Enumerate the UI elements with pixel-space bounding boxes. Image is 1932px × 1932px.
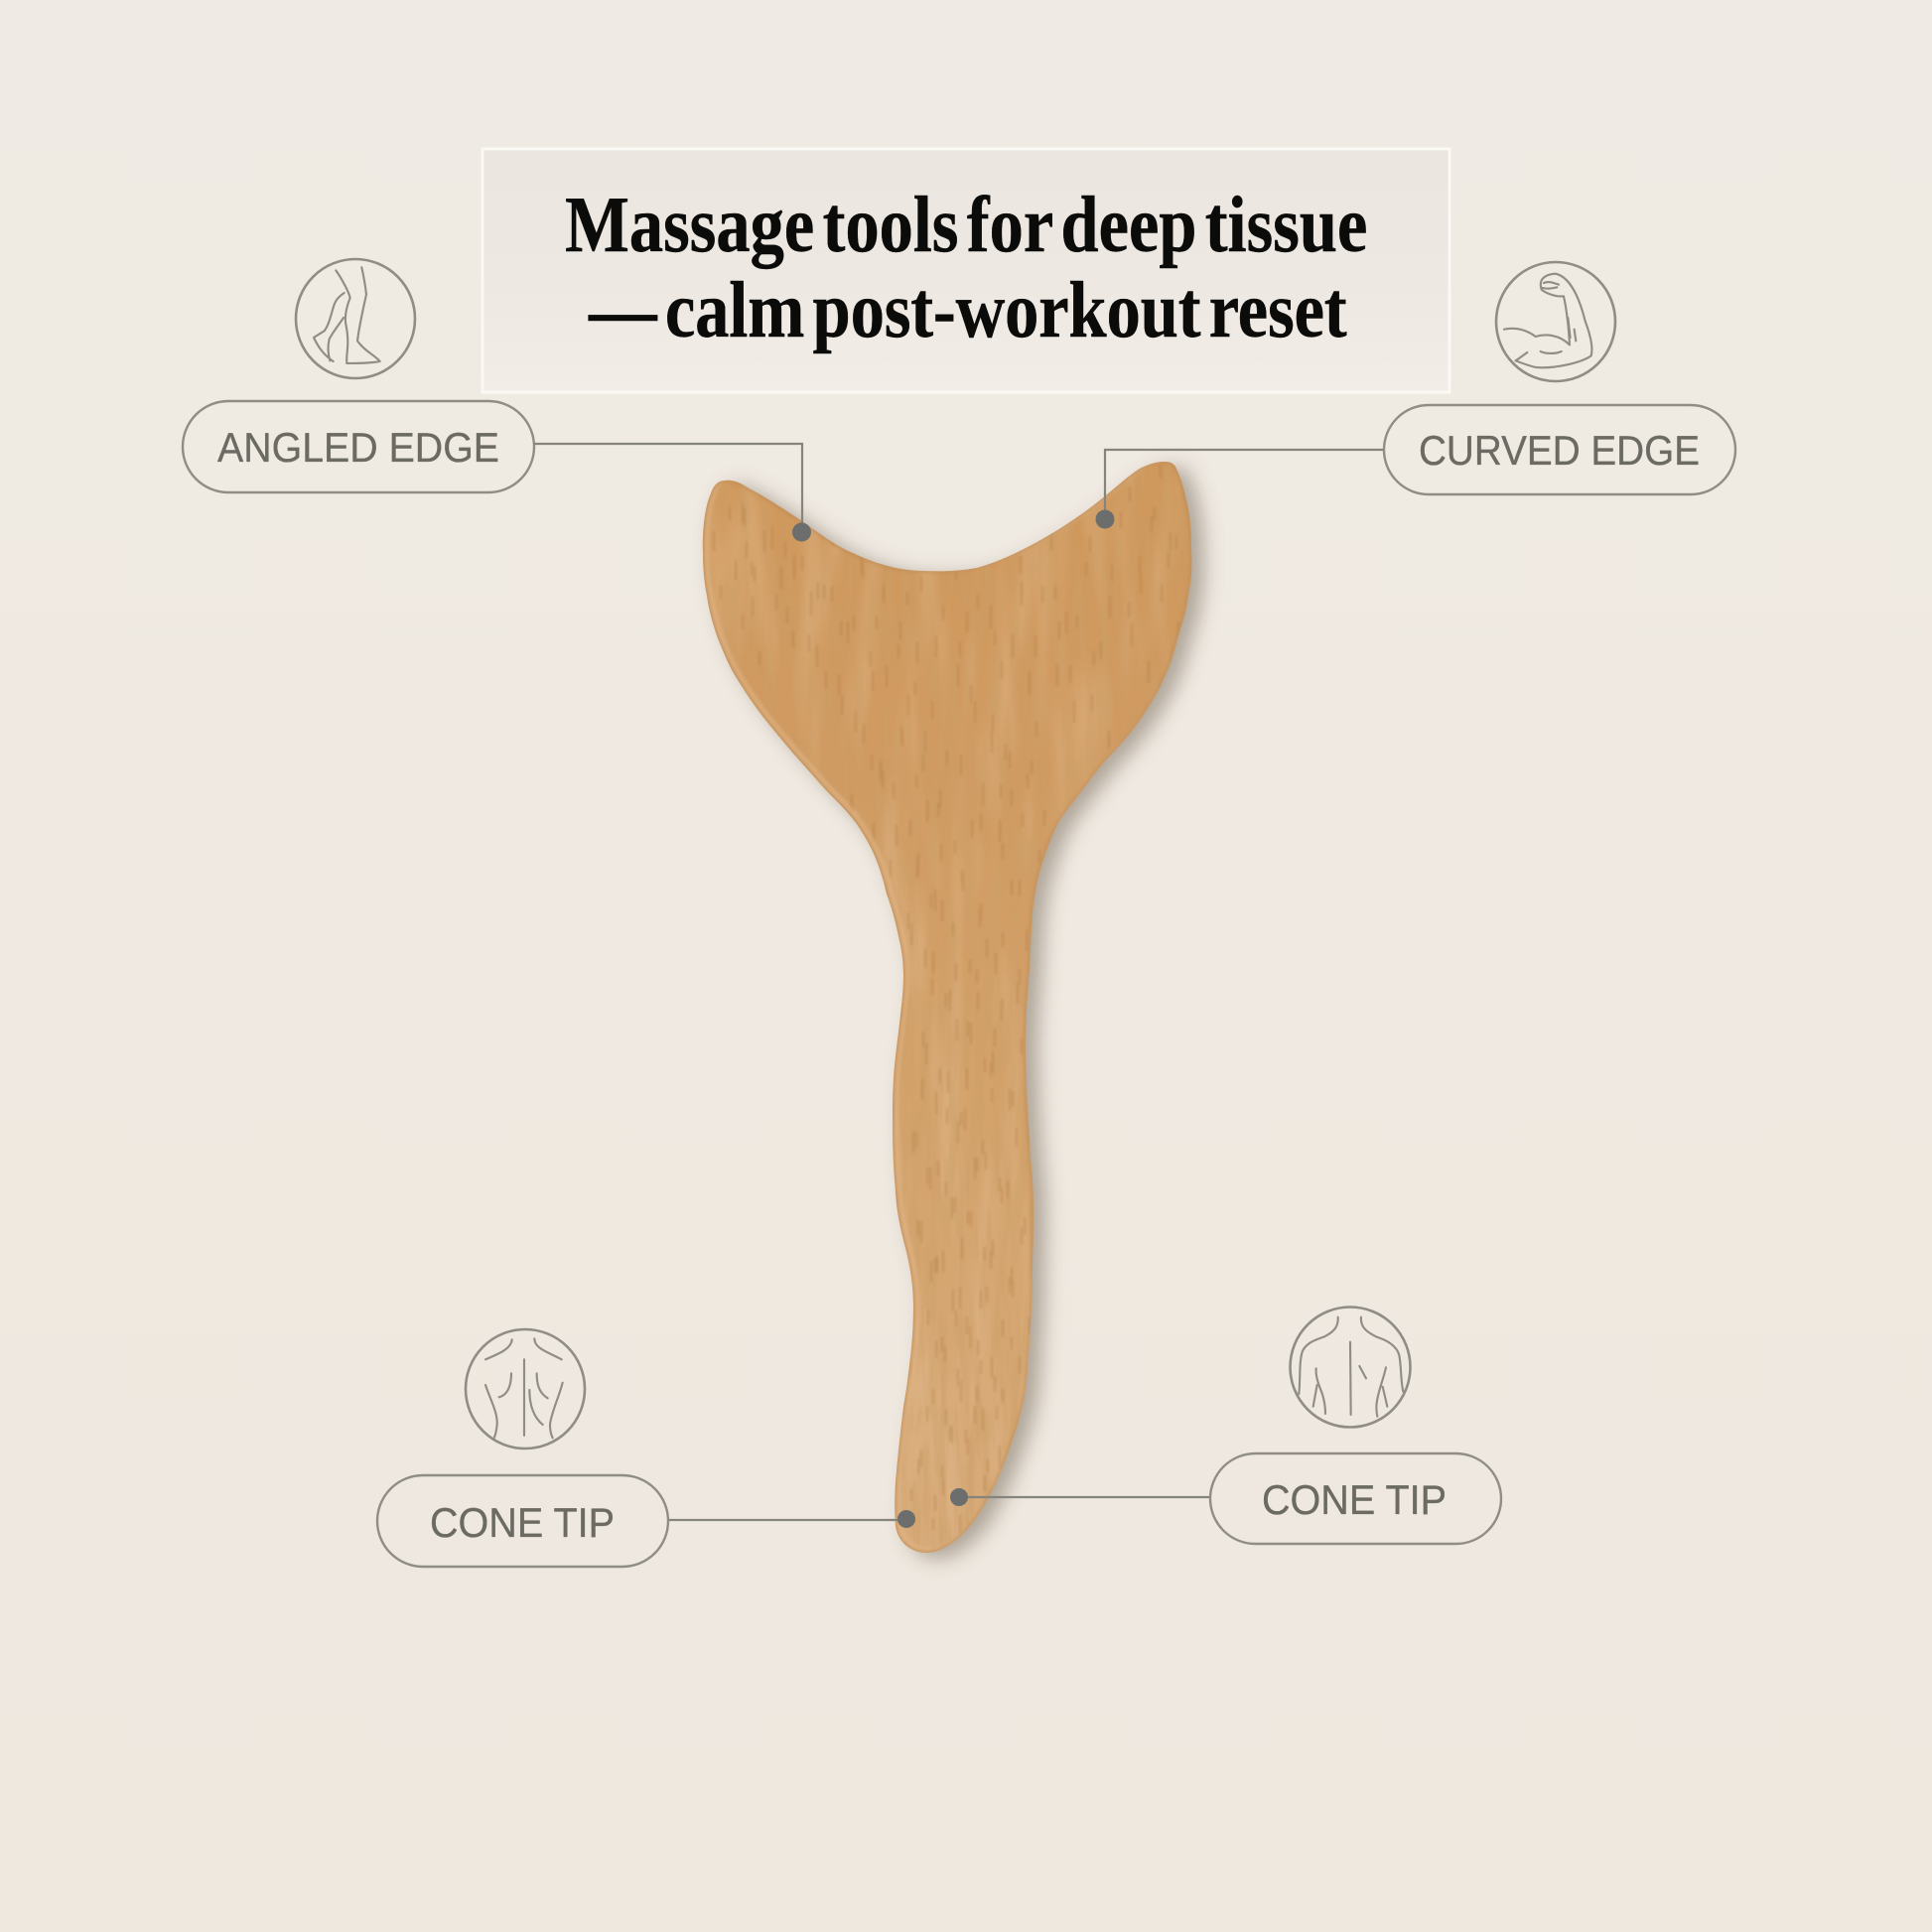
title panel	[483, 149, 1449, 392]
label pill: CONE TIP: CONE TIP	[1262, 1476, 1447, 1523]
label pill: CONE TIP	[377, 1475, 668, 1567]
wooden massage tool	[685, 447, 1211, 1569]
icon: shoulders and back	[1291, 1307, 1410, 1428]
connector	[1105, 450, 1383, 519]
marker	[1096, 510, 1114, 528]
label pill: CURVED EDGE: CURVED EDGE	[1419, 427, 1700, 474]
label pill: ANGLED EDGE: ANGLED EDGE	[217, 424, 499, 471]
icon: upper back	[466, 1329, 585, 1449]
label pill: CURVED EDGE	[1384, 405, 1735, 494]
callout: cone tip left	[377, 1329, 915, 1567]
icon: flexed arm	[1496, 262, 1615, 381]
marker	[897, 1510, 915, 1528]
marker	[792, 522, 811, 542]
callout: curved edge	[1096, 262, 1735, 528]
label pill: ANGLED EDGE	[183, 401, 534, 492]
marker	[950, 1488, 968, 1506]
label pill: CONE TIP	[1210, 1453, 1501, 1544]
label pill: CONE TIP: CONE TIP	[430, 1499, 615, 1546]
title	[565, 182, 1367, 354]
icon: legs	[296, 259, 415, 378]
connector	[967, 1496, 1209, 1498]
connector	[669, 1519, 898, 1521]
connector	[534, 444, 802, 531]
callout: cone tip right	[950, 1307, 1501, 1544]
callout: angled edge	[183, 259, 811, 542]
title: Massage tools for deep tissue	[565, 182, 1367, 269]
title: — calm post-workout reset	[588, 267, 1347, 354]
